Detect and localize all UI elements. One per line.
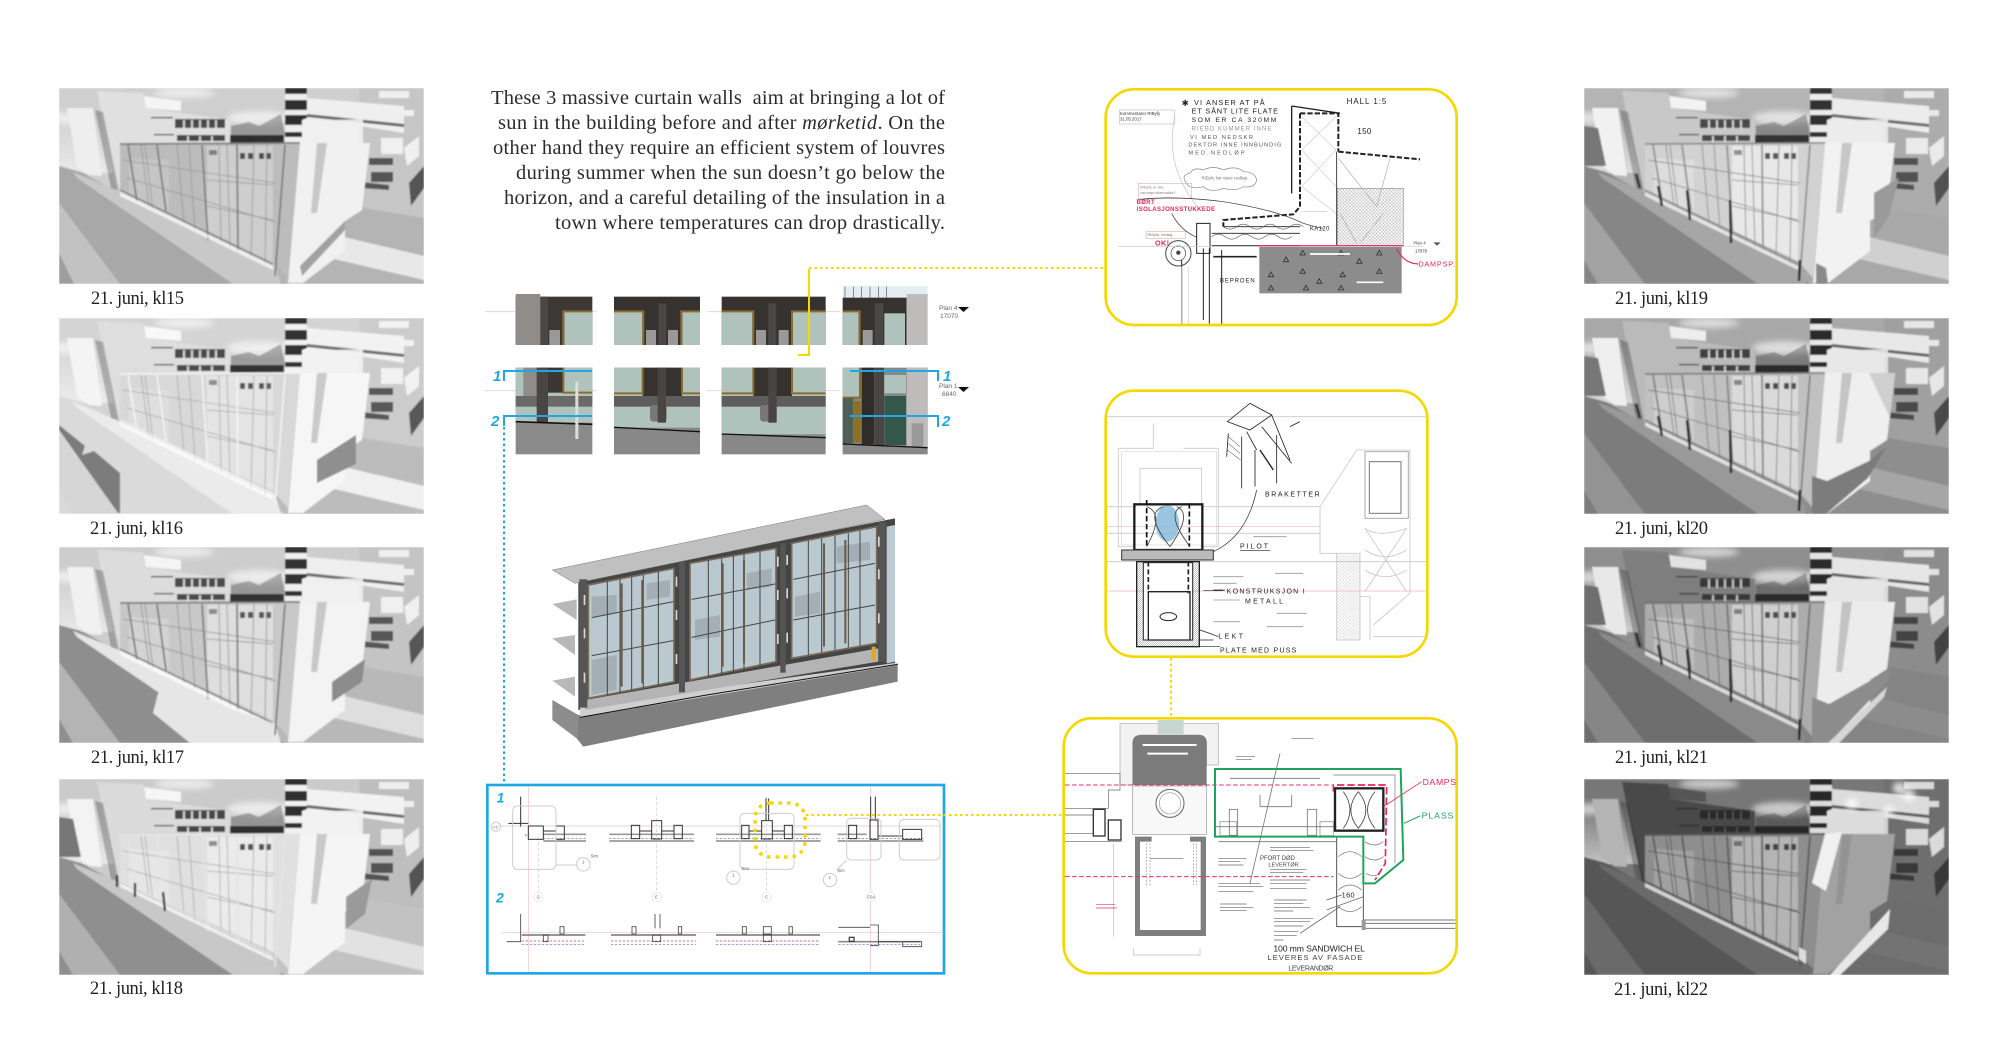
panel: section plans box: G (537, 895, 541, 900)
panel: sketch 2 bracket detail (1106, 391, 1427, 657)
elevation: bottom row panel 4 (843, 368, 928, 454)
arrow: yellow leader to sketch 1 (798, 269, 809, 355)
insulation and box (1300, 775, 1457, 933)
handwritten labels: LEVERANDØR (1288, 966, 1333, 973)
panel: section plans box: 1 (497, 789, 505, 805)
panel: section plans box: C (765, 895, 768, 900)
photo: 21 juni kl16 (52, 318, 424, 514)
pink level lines (1065, 785, 1333, 877)
left window frame (1065, 773, 1122, 842)
handwritten labels: 160 (1342, 890, 1355, 899)
elevation: top row panel 4 (843, 286, 928, 345)
handwritten notes: RIByfy har være nedløp (1202, 175, 1248, 180)
handwritten labels: LEKT (1218, 633, 1244, 640)
handwritten notes: DAMPSP. (1418, 260, 1455, 269)
panel: section plans box (487, 785, 944, 973)
handwritten notes: RIByfy: bedag (1147, 232, 1172, 237)
handwritten labels: BRAKETTER (1265, 492, 1320, 499)
intro text block (491, 87, 945, 234)
arrow: yellow dotted leader to sketch 3 (806, 814, 1064, 816)
handwritten notes: varmeproblematisk? (1140, 190, 1177, 195)
elevation: top row panel 2 (614, 297, 700, 345)
caption: kl18: 21. juni, kl18 (90, 979, 183, 999)
photo: 21 juni kl20 (1577, 318, 1949, 514)
handwritten labels (1218, 492, 1320, 655)
handwritten notes: BEPROEN (1220, 279, 1255, 285)
handwritten labels: PLATE MED PUSS (1220, 648, 1297, 655)
handwritten labels (1260, 777, 1456, 973)
concrete slab (1259, 247, 1402, 293)
arrow: dotted blue leader to plan box (503, 427, 505, 785)
handwritten notes: RIByfy er ske (1140, 185, 1164, 190)
bracket sketch (1213, 403, 1300, 552)
row 1 section details: F1 (493, 824, 499, 829)
elevation drawings (485, 286, 928, 454)
arrow: yellow dotted leader between sketches (1170, 658, 1172, 718)
handwritten notes: Kommentarer RIByfy (1120, 111, 1161, 116)
parapet (1182, 106, 1420, 325)
level label: Plan 4: Plan 4 (939, 305, 958, 312)
axonometric curtain wall model (552, 505, 898, 747)
handwritten notes: SOM ER CA 320MM (1192, 117, 1277, 124)
section markers: 1 and 2: 1 (493, 368, 501, 385)
photo: 21 juni kl17 (52, 547, 424, 743)
level label: Plan 1 (939, 383, 969, 398)
section markers: 1 and 2: 2 (490, 413, 500, 430)
handwritten notes: MED NEDLØP (1188, 151, 1245, 157)
glazing unit 2 (690, 548, 776, 680)
glazing unit 3 (792, 527, 877, 658)
beam (1122, 550, 1213, 560)
section markers: 1 and 2 (490, 368, 951, 430)
green outline (1215, 769, 1403, 883)
handwritten notes: HALL 1:5 (1347, 97, 1387, 106)
base glazing (585, 648, 878, 710)
handwritten labels: 100 mm SANDWICH EL (1273, 944, 1365, 954)
highlight: yellow dotted detail marker (755, 803, 805, 857)
vapour barrier line (1258, 246, 1418, 264)
hatched wall block (1337, 188, 1403, 246)
intro text block: sun in the building before and after mørketid. On the (498, 112, 945, 134)
caption: kl21: 21. juni, kl21 (1615, 748, 1708, 768)
window units (1215, 753, 1337, 883)
row 1 section details: Sim (591, 853, 599, 858)
photo: 21 juni kl15 (52, 88, 424, 284)
handwritten labels: LEVERTØR (1268, 863, 1299, 869)
handwritten notes: KA120 (1310, 227, 1330, 233)
yellow service element (872, 647, 876, 661)
caption: kl16: 21. juni, kl16 (90, 519, 183, 539)
panel: section plans box: F0A (867, 895, 875, 900)
grid lines (497, 787, 943, 972)
handwritten labels: PLASS (1422, 810, 1454, 820)
row 1 section details: F2 (525, 833, 530, 838)
intro text block: town where temperatures can drop drastically. (555, 212, 945, 234)
caption: kl15: 21. juni, kl15 (91, 289, 184, 309)
handwritten labels: DAMPS (1423, 777, 1456, 787)
section markers: 1 and 2: 2 (941, 413, 951, 430)
intro text block: horizon, and a careful detailing of the insulation in a (504, 187, 945, 209)
level label: Plan 4: 17070 (940, 313, 958, 320)
concrete column section (1113, 720, 1218, 955)
panel: sketch 1 parapet detail (1106, 89, 1457, 325)
handwritten labels: PILOT (1240, 543, 1269, 550)
small note blocks (1150, 738, 1313, 940)
handwritten notes: 31.05.2017 (1120, 117, 1142, 122)
lower box (1137, 562, 1223, 647)
elevation: bottom row panel 2 (614, 368, 700, 454)
level label: Plan 1: Plan 1 (939, 383, 958, 390)
row 1 section details (491, 797, 940, 887)
section markers: 1 and 2: 1 (943, 368, 951, 385)
pole (1166, 241, 1191, 266)
elevation: bottom row panel 1 (516, 368, 592, 454)
handwritten notes: DEKTOR INNE INNBUNDIG (1188, 143, 1282, 149)
handwritten notes: Plan 4 (1413, 241, 1426, 246)
caption: kl19: 21. juni, kl19 (1615, 289, 1708, 309)
handwritten labels: PFORT DØD (1260, 856, 1296, 862)
handwritten labels: LEVERES AV FASADE (1267, 953, 1362, 962)
intro text block: These 3 massive curtain walls aim at bringing a lot of (491, 87, 945, 109)
row 2 section details (507, 914, 922, 947)
caption: kl20: 21. juni, kl20 (1615, 519, 1708, 539)
handwritten notes: OK! (1155, 239, 1169, 248)
level label: Plan 1: 6840 (942, 391, 957, 398)
structural piers (579, 522, 886, 708)
elevation: bottom row panel 3 (722, 368, 826, 454)
row 1 section details: 1 (829, 875, 832, 880)
photo: 21 juni kl21 (1577, 547, 1949, 743)
caption: kl22: 21. juni, kl22 (1614, 980, 1708, 1000)
photo: 21 juni kl18 (52, 779, 424, 975)
row 1 section details: Sim (742, 866, 750, 871)
handwritten notes (1120, 97, 1455, 285)
handwritten labels: METALL (1245, 598, 1283, 605)
panel: section plans box: E (655, 895, 658, 900)
photo: 21 juni kl19 (1577, 88, 1949, 284)
intro text block: other hand they require an efficient system of louvres (493, 137, 945, 159)
level label: Plan 4 (939, 305, 969, 320)
comment cloud (1184, 167, 1257, 190)
handwritten notes: BØRT (1137, 200, 1155, 206)
grid bubbles (534, 892, 875, 902)
handwritten notes: VI ANSER AT PÅ (1194, 98, 1265, 107)
intro text block: during summer when the sun doesn’t go below the (516, 162, 945, 184)
glazing unit 1 (588, 568, 674, 698)
handwritten notes: 17070 (1415, 249, 1428, 254)
elevation: top row panel 3 (722, 297, 826, 345)
handwritten notes: VI MED NEDSKR (1190, 135, 1253, 141)
panel: sketch 3 section detail (1064, 718, 1457, 973)
faint background drawing (1107, 417, 1427, 640)
row 1 section details: 1 (582, 859, 585, 864)
row 1 section details: 1 (732, 873, 735, 878)
row 1 section details: Sim (837, 868, 845, 873)
handwritten notes: ISOLASJONSSTUKKEDE (1137, 207, 1215, 213)
arrow: yellow dotted leader to sketch 1 (809, 267, 1106, 269)
handwritten labels: KONSTRUKSJON I (1227, 588, 1305, 595)
photo: 21 juni kl22 (1577, 779, 1949, 975)
elevation: top row panel 1 (516, 294, 592, 345)
handwritten notes: RIEBD KUMMER INNE (1192, 126, 1272, 132)
handwritten notes: ✱ (1182, 98, 1189, 108)
insulated box (1134, 500, 1202, 550)
caption: kl17: 21. juni, kl17 (91, 748, 184, 768)
panel: section plans box: 2 (495, 889, 504, 905)
handwritten notes: ET SÅNT LITE FLATE (1192, 106, 1278, 115)
handwritten notes: 150 (1357, 127, 1372, 136)
